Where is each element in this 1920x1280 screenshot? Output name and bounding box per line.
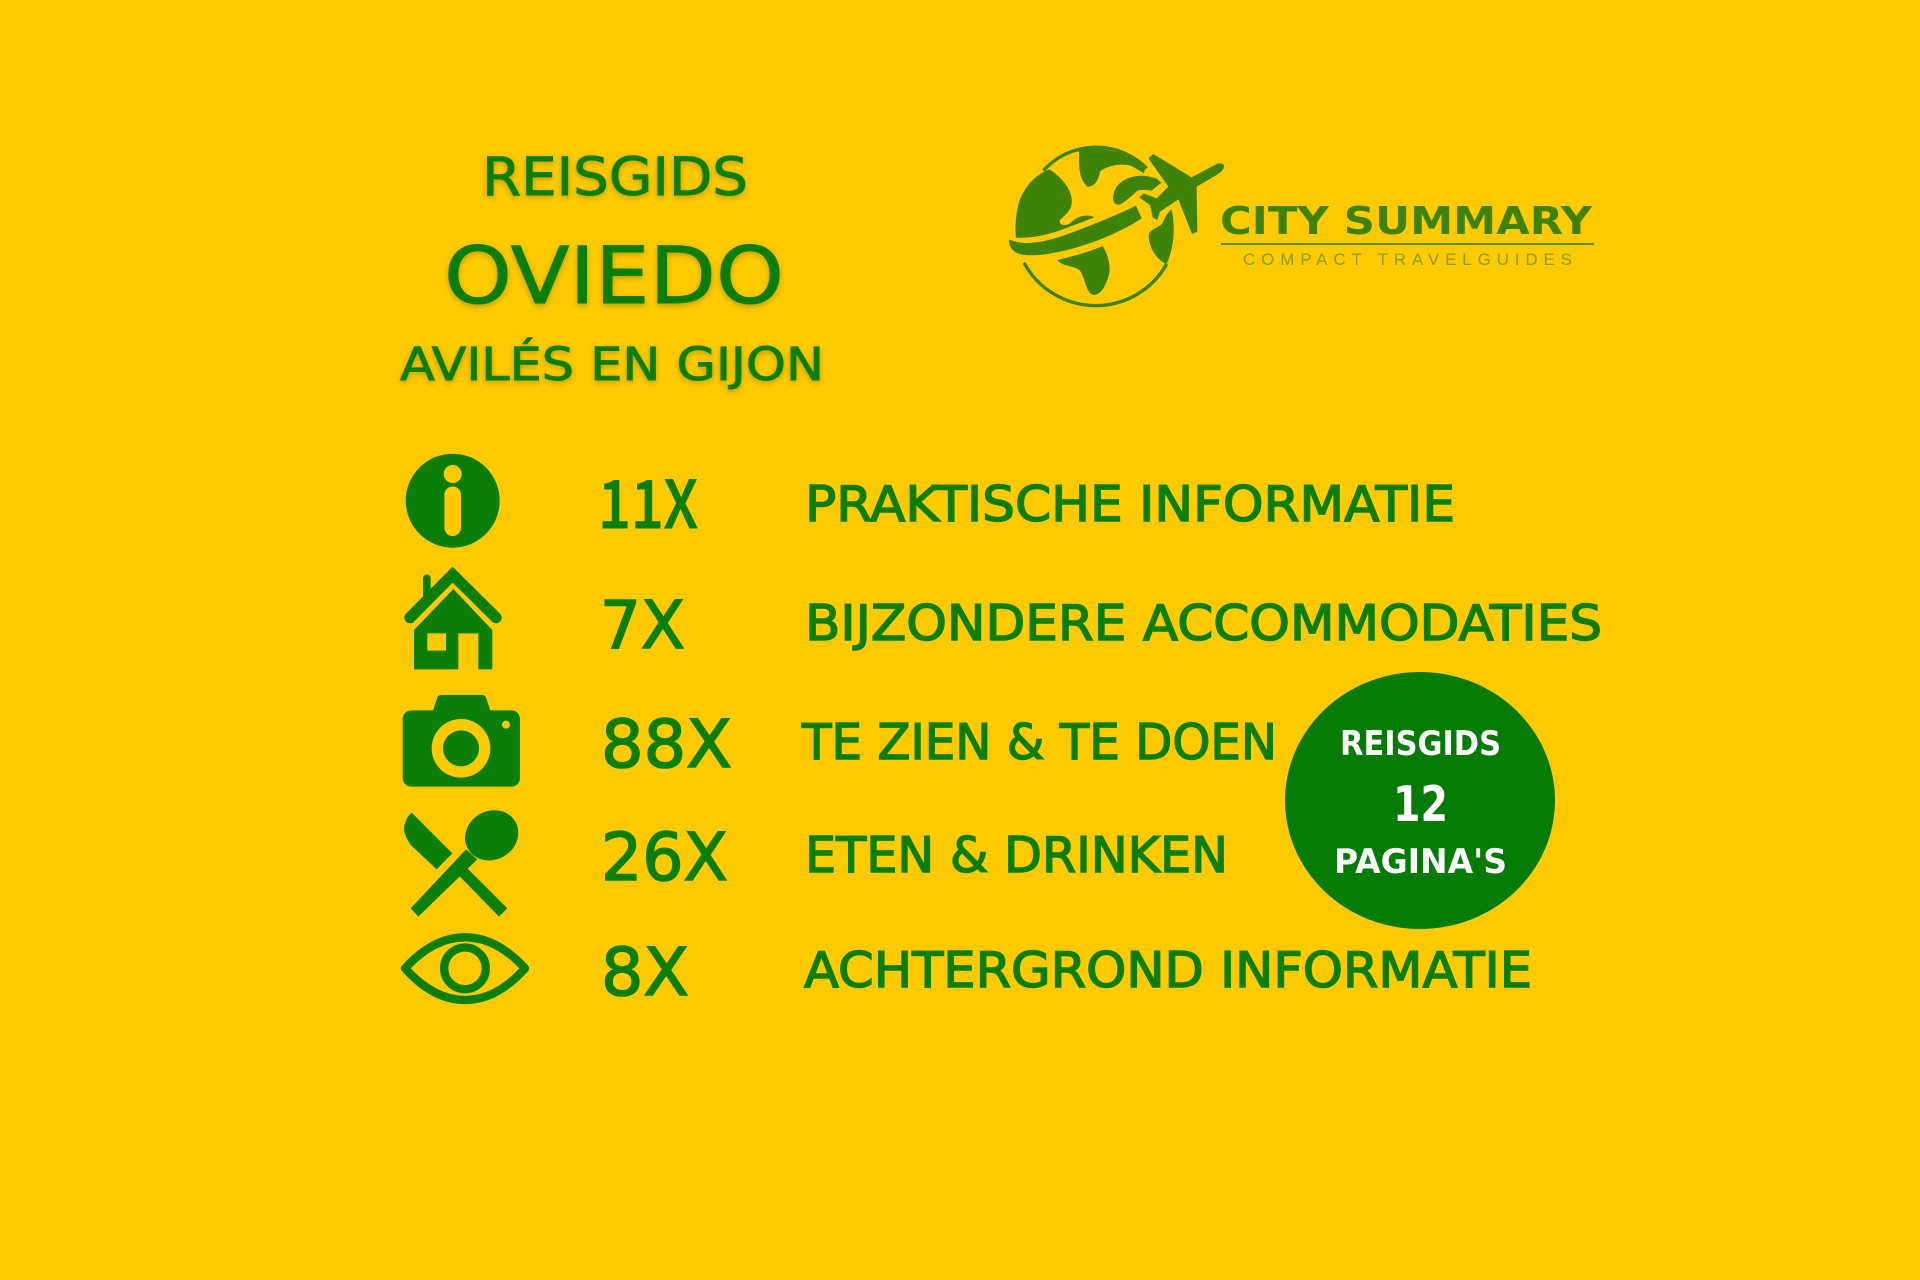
plane [1139, 154, 1224, 234]
count: 7x: 7X [600, 587, 685, 664]
count: 88x: 88X [601, 706, 732, 783]
badge: 12 pagina's [1285, 672, 1555, 929]
count: 11x: 11X [598, 452, 698, 548]
title block [400, 147, 824, 391]
globe bottom ring [1024, 263, 1167, 306]
icon: eye [405, 937, 525, 1000]
badge text: pagina's: PAGINA'S [1334, 842, 1507, 882]
logo: city summary [1009, 147, 1594, 306]
icon: globe with plane [1009, 147, 1224, 306]
icon: house [410, 574, 496, 669]
count: 8x: 8X [601, 934, 689, 1011]
label: eten en drinken: ETEN & DRINKEN [805, 827, 1228, 884]
subheading: avilés en gijon: AVILÉS EN GIJON [400, 338, 824, 391]
land: left [1016, 169, 1094, 238]
label: achtergrond informatie: ACHTERGROND INFORMATIE [804, 942, 1532, 999]
logo name: CITY SUMMARY [1220, 199, 1593, 243]
badge number: 12 [1393, 776, 1448, 833]
logo tagline: COMPACT TRAVELGUIDES [1243, 250, 1572, 269]
land: top [1079, 149, 1145, 187]
label: te zien en te doen: TE ZIEN & TE DOEN [801, 714, 1277, 771]
label: bijzondere accommodaties: BIJZONDERE ACCOMMODATIES [805, 595, 1602, 652]
land: upper right [1113, 176, 1161, 205]
land: bottom [1057, 246, 1110, 295]
icon: camera [403, 695, 520, 787]
heading: reisgids: REISGIDS [482, 147, 748, 208]
globe top outline [1043, 147, 1147, 171]
swoosh [1009, 206, 1142, 255]
heading: oviedo: OVIEDO [444, 232, 784, 322]
label: praktische informatie: PRAKTISCHE INFORMATIE [805, 476, 1455, 533]
icon: knife and spoon [404, 801, 528, 917]
category labels [801, 476, 1602, 999]
land: lower right [1149, 209, 1174, 264]
icon: info [406, 454, 500, 548]
badge text: reisgids: REISGIDS [1340, 724, 1501, 764]
count: 26x: 26X [601, 819, 728, 896]
counts [598, 452, 732, 1011]
